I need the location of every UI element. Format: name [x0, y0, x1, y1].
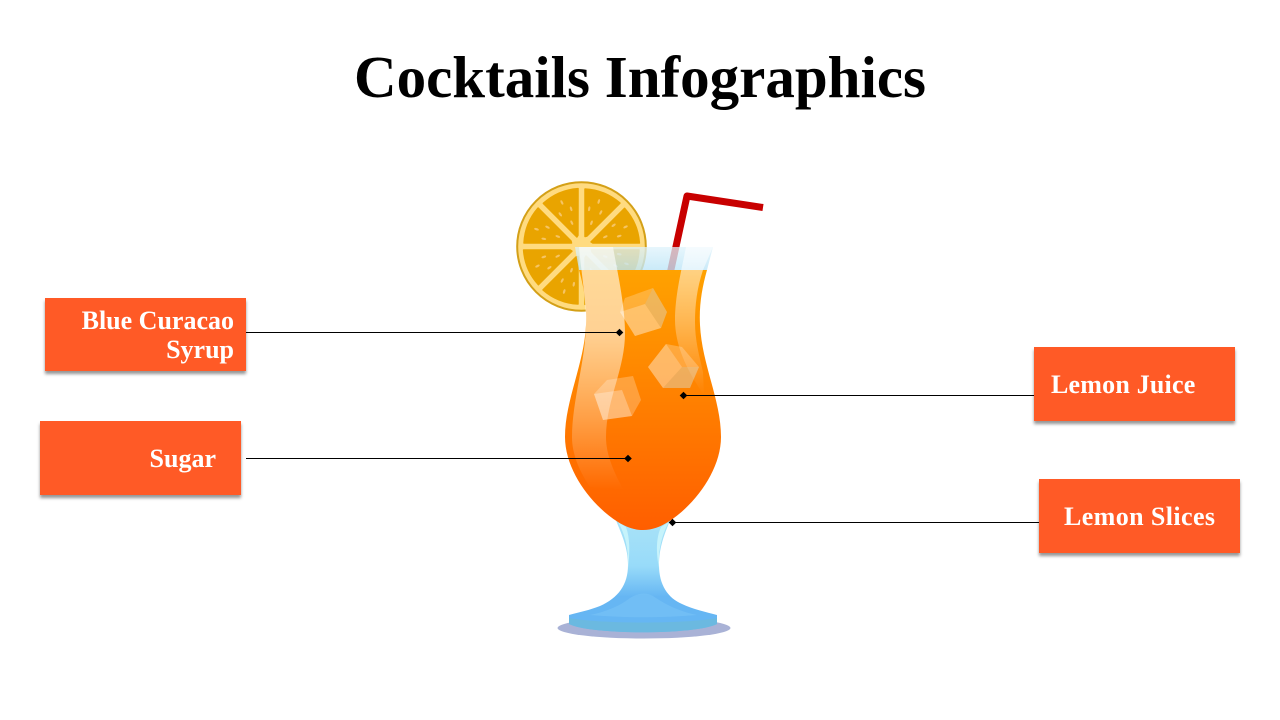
ice cube 1	[620, 288, 667, 336]
leader line: Lemon Slices	[669, 519, 1039, 526]
orange liquid in glass	[565, 270, 721, 530]
label: Blue Curacao Syrup: Syrup	[166, 335, 234, 364]
label: Lemon Slices: Lemon Slices	[1064, 502, 1215, 531]
straw	[670, 196, 763, 274]
glass left highlight	[572, 247, 625, 489]
ice cube 3	[594, 376, 641, 420]
leader line: Lemon Juice	[680, 392, 1034, 399]
label: Lemon Juice	[1034, 347, 1235, 421]
ice cube 2	[648, 344, 699, 388]
orange slice garnish	[514, 179, 649, 314]
leader line: Blue Curacao Syrup	[246, 329, 623, 336]
label: Sugar: Sugar	[150, 444, 216, 473]
label: Blue Curacao Syrup	[45, 298, 246, 371]
label: Lemon Slices	[1039, 479, 1240, 553]
label: Blue Curacao Syrup: Blue Curacao	[82, 306, 234, 335]
glass stem and foot	[569, 518, 717, 632]
glass rim	[575, 247, 713, 270]
glass base shadow	[558, 618, 730, 638]
label: Sugar	[40, 421, 241, 495]
ice cubes	[594, 288, 699, 420]
leader line: Sugar	[246, 455, 632, 462]
label: Lemon Juice: Lemon Juice	[1051, 370, 1195, 399]
title: Cocktails Infographics	[354, 44, 926, 110]
glass right highlight	[675, 247, 713, 395]
